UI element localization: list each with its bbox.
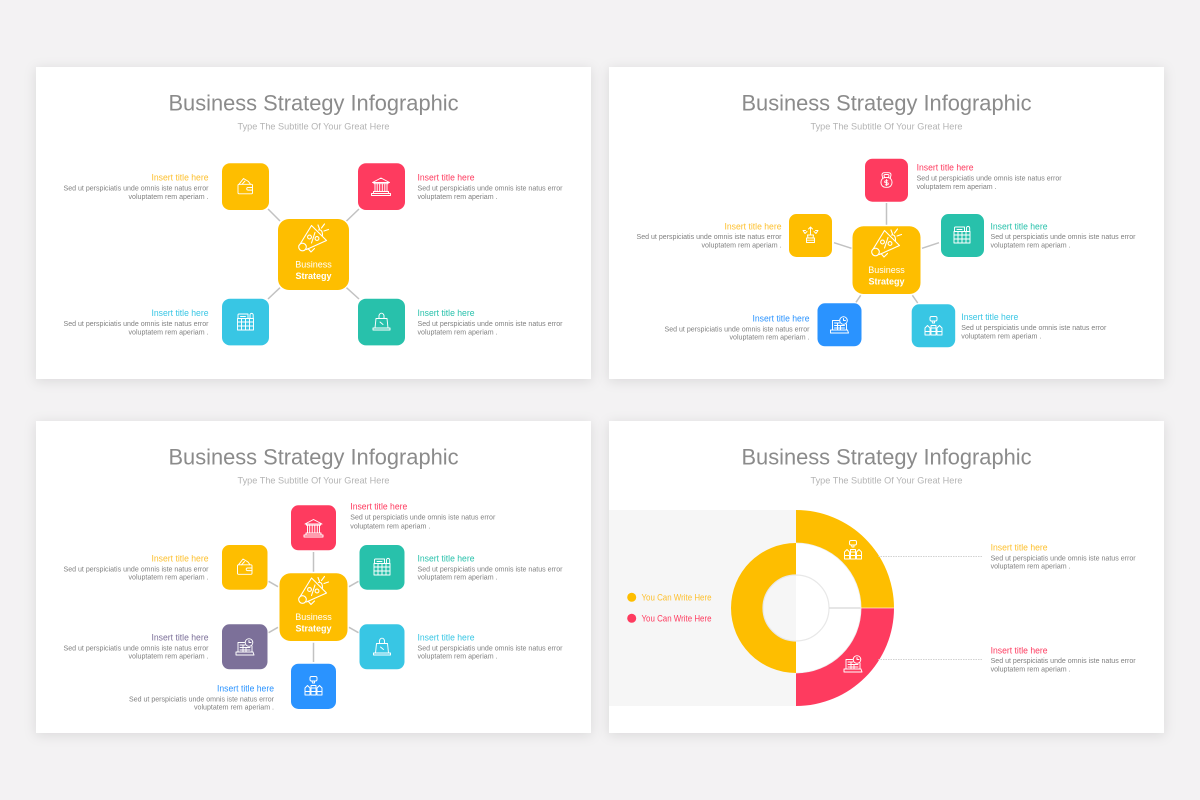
panel: six-item strategy slide bbox=[36, 421, 591, 733]
text block: upper left: voluptatem rem aperiam . bbox=[128, 575, 209, 582]
arc separator bbox=[861, 607, 894, 609]
panel: donut chart slide bbox=[609, 421, 1164, 733]
slide card bbox=[36, 421, 591, 733]
node: shopping bag bbox=[358, 299, 405, 345]
text block: bottom right bbox=[418, 308, 563, 337]
node: wallet bbox=[222, 545, 268, 590]
text block: bottom right bbox=[961, 312, 1107, 340]
text block: bottom left: Sed ut perspiciatis unde omnis iste natus error bbox=[664, 326, 810, 333]
text block: bottom right: voluptatem rem aperiam . bbox=[961, 333, 1041, 340]
text block: top bbox=[350, 502, 496, 530]
legend: You Can Write Here bbox=[642, 614, 712, 624]
inner divider bbox=[829, 607, 861, 609]
text block: lower right: Insert title here bbox=[418, 633, 474, 643]
subtitle: Type The Subtitle Of Your Great Here bbox=[238, 122, 390, 132]
left half ring: yellow bbox=[731, 543, 796, 673]
text block: bottom left bbox=[664, 313, 810, 342]
text block: bottom left: Insert title here bbox=[152, 308, 208, 318]
slide card bbox=[36, 67, 591, 379]
text block: right bbox=[990, 222, 1136, 250]
text block: upper right: voluptatem rem aperiam . bbox=[418, 575, 498, 582]
text block: upper right: Sed ut perspiciatis unde omnis iste natus error bbox=[418, 566, 563, 573]
text block: upper right: Insert title here bbox=[418, 553, 474, 563]
text block: bottom right: Sed ut perspiciatis unde omnis iste natus error bbox=[418, 321, 563, 328]
middle ring edge bbox=[796, 543, 861, 673]
text block: top: Sed ut perspiciatis unde omnis iste natus error bbox=[917, 176, 1062, 183]
center node: business strategy: Strategy bbox=[295, 624, 332, 634]
legend: You Can Write Here bbox=[642, 592, 712, 602]
center node: business strategy bbox=[280, 573, 348, 641]
grey backdrop bbox=[609, 510, 796, 706]
node: lock bbox=[865, 159, 908, 202]
text block: yellow item: Insert title here bbox=[991, 542, 1048, 552]
center node: business strategy: Business bbox=[295, 612, 332, 622]
text block: red item: voluptatem rem aperiam . bbox=[991, 666, 1071, 673]
text block: top left: Sed ut perspiciatis unde omnis iste natus error bbox=[64, 186, 209, 193]
text block: top right: Sed ut perspiciatis unde omnis iste natus error bbox=[418, 186, 563, 193]
text block: top: voluptatem rem aperiam . bbox=[917, 184, 997, 191]
text block: top left: Insert title here bbox=[152, 172, 208, 182]
text block: lower left: Insert title here bbox=[152, 633, 208, 643]
center node: business strategy: Business bbox=[868, 265, 905, 275]
text block: left bbox=[636, 222, 782, 250]
text block: bottom right: Sed ut perspiciatis unde omnis iste natus error bbox=[961, 325, 1107, 332]
slide card bbox=[609, 421, 1164, 733]
text block: yellow item bbox=[991, 542, 1136, 571]
text block: upper right bbox=[418, 553, 563, 582]
center node: business strategy bbox=[852, 226, 920, 294]
text block: top bbox=[917, 163, 1062, 191]
text block: lower left: voluptatem rem aperiam . bbox=[128, 654, 209, 661]
legend bbox=[627, 592, 712, 624]
center node: business strategy: Business bbox=[295, 260, 332, 270]
subtitle: Type The Subtitle Of Your Great Here bbox=[238, 476, 390, 486]
node: laptop bbox=[818, 303, 862, 346]
subtitle: Type The Subtitle Of Your Great Here bbox=[810, 122, 962, 132]
text block: right: Insert title here bbox=[990, 222, 1048, 232]
text block: top right bbox=[418, 172, 563, 201]
node: blocks bbox=[291, 664, 336, 709]
node: building bbox=[941, 214, 984, 257]
text block: right: Sed ut perspiciatis unde omnis iste natus error bbox=[990, 234, 1136, 241]
icon: blocks bbox=[844, 540, 862, 559]
text block: left: voluptatem rem aperiam . bbox=[702, 242, 782, 250]
text block: bottom bbox=[129, 684, 275, 712]
text block: top: Insert title here bbox=[917, 163, 974, 173]
node: trophy bbox=[789, 214, 832, 257]
node: building bbox=[222, 299, 269, 345]
text block: lower left bbox=[64, 633, 209, 661]
panel: four-item strategy slide bbox=[36, 67, 591, 379]
text block: left: Sed ut perspiciatis unde omnis iste natus error bbox=[636, 234, 782, 241]
text block: lower right: voluptatem rem aperiam . bbox=[418, 654, 498, 661]
text block: bottom left: Insert title here bbox=[752, 313, 810, 323]
panel: five-item strategy slide bbox=[609, 67, 1164, 379]
text block: lower left: Sed ut perspiciatis unde omnis iste natus error bbox=[64, 645, 209, 652]
text block: bottom right: Insert title here bbox=[961, 312, 1018, 322]
text block: top right: voluptatem rem aperiam . bbox=[418, 194, 498, 201]
text block: lower right: Sed ut perspiciatis unde omnis iste natus error bbox=[418, 645, 563, 652]
text block: red item bbox=[991, 645, 1136, 673]
text block: right: voluptatem rem aperiam . bbox=[990, 242, 1071, 250]
center node: business strategy: Strategy bbox=[868, 276, 905, 286]
node: bank bbox=[358, 163, 405, 210]
heading: Business Strategy Infographic bbox=[168, 90, 458, 116]
text block: lower right bbox=[418, 633, 563, 661]
text block: bottom left: Sed ut perspiciatis unde omnis iste natus error bbox=[64, 321, 209, 328]
text block: top: Insert title here bbox=[350, 502, 407, 512]
connectors bbox=[834, 203, 939, 303]
text block: upper left: Sed ut perspiciatis unde omnis iste natus error bbox=[64, 566, 209, 573]
heading: Business Strategy Infographic bbox=[742, 444, 1032, 470]
text block: bottom right: Insert title here bbox=[418, 308, 474, 318]
leader lines bbox=[878, 556, 982, 660]
text block: yellow item: voluptatem rem aperiam . bbox=[991, 564, 1071, 571]
text block: bottom: Sed ut perspiciatis unde omnis iste natus error bbox=[129, 696, 275, 703]
outer arc: yellow bbox=[796, 510, 894, 608]
text block: upper left bbox=[64, 553, 209, 582]
slide card bbox=[609, 67, 1164, 379]
center node: business strategy: Strategy bbox=[295, 271, 332, 281]
text block: bottom left bbox=[64, 308, 209, 337]
node: laptop bbox=[222, 624, 268, 669]
connectors bbox=[269, 552, 358, 662]
node: shopping bag bbox=[360, 624, 404, 669]
text block: bottom left: voluptatem rem aperiam . bbox=[730, 335, 810, 342]
node: bank bbox=[291, 505, 336, 550]
node: blocks bbox=[912, 304, 955, 347]
center node: business strategy bbox=[278, 219, 349, 290]
node: building bbox=[360, 545, 404, 590]
heading: Business Strategy Infographic bbox=[168, 444, 458, 470]
text block: left: Insert title here bbox=[724, 222, 782, 232]
text block: yellow item: Sed ut perspiciatis unde omnis iste natus error bbox=[991, 555, 1136, 562]
heading: Business Strategy Infographic bbox=[742, 90, 1032, 116]
text block: top: voluptatem rem aperiam . bbox=[350, 523, 430, 530]
connectors bbox=[268, 209, 359, 299]
text block: bottom right: voluptatem rem aperiam . bbox=[418, 330, 498, 337]
text block: bottom: Insert title here bbox=[217, 684, 274, 694]
text block: top left: voluptatem rem aperiam . bbox=[128, 194, 209, 201]
subtitle: Type The Subtitle Of Your Great Here bbox=[810, 476, 962, 486]
inner circle outline bbox=[763, 575, 829, 641]
icon: laptop bbox=[844, 656, 862, 672]
text block: bottom left: voluptatem rem aperiam . bbox=[128, 330, 209, 337]
text block: upper left: Insert title here bbox=[152, 553, 208, 563]
node: wallet bbox=[222, 163, 269, 210]
text block: bottom: voluptatem rem aperiam . bbox=[194, 705, 274, 712]
chart: layered half donuts bbox=[731, 510, 894, 706]
text block: top left bbox=[64, 172, 209, 201]
text block: red item: Sed ut perspiciatis unde omnis iste natus error bbox=[991, 658, 1136, 665]
text block: red item: Insert title here bbox=[991, 645, 1048, 655]
text block: top right: Insert title here bbox=[418, 172, 474, 182]
text block: top: Sed ut perspiciatis unde omnis iste natus error bbox=[350, 515, 496, 522]
outer arc: red bbox=[796, 608, 894, 706]
